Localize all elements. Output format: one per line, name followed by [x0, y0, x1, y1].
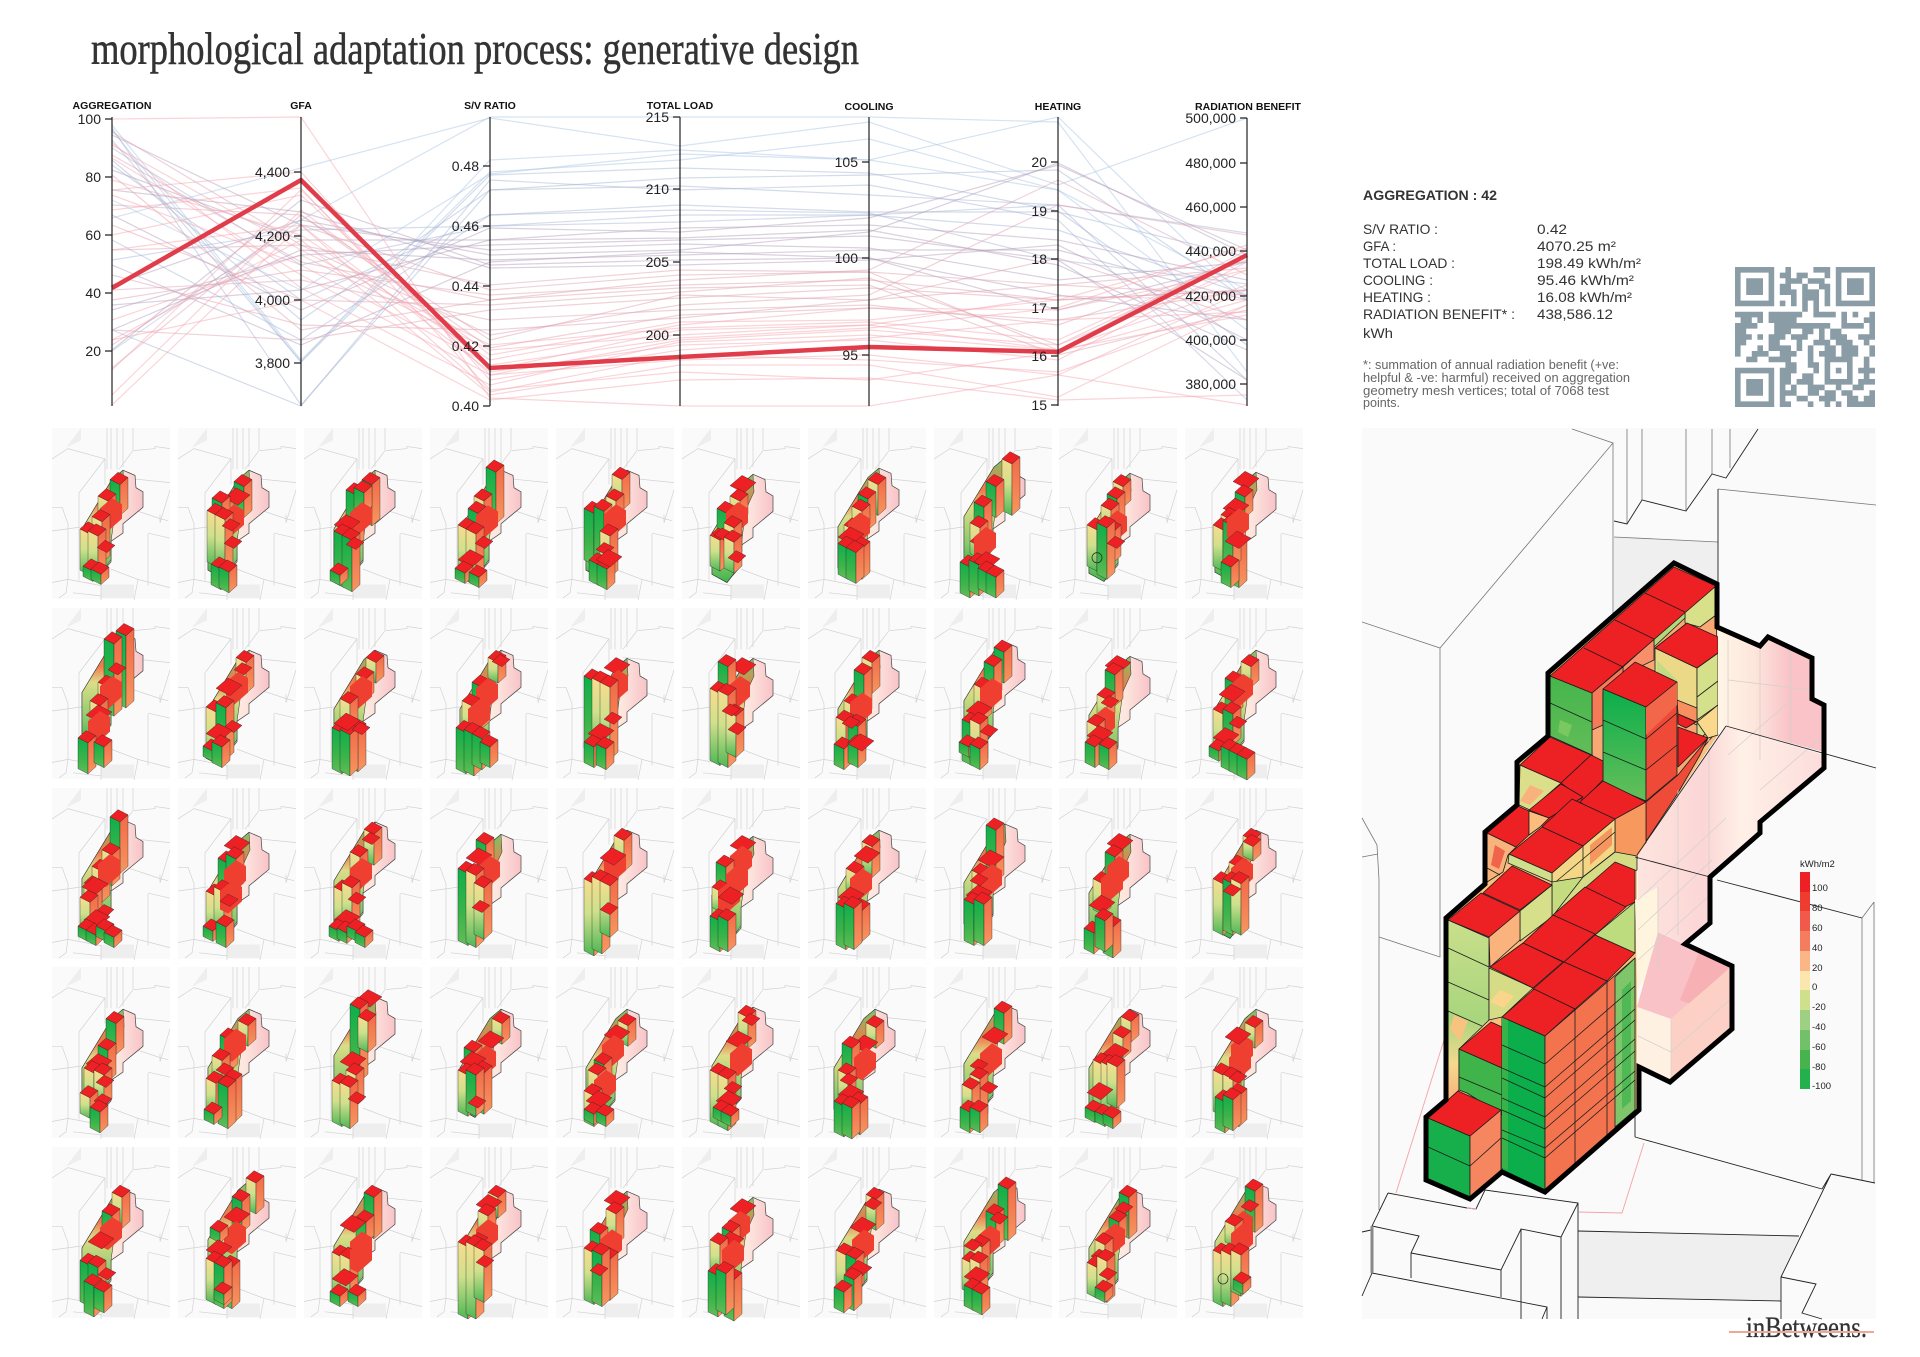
- thumbnail row 3 col 6: [682, 788, 800, 960]
- axis: GFA: GFA: [290, 100, 312, 112]
- axis: S/V ratio: 0.44: [452, 278, 479, 294]
- thumbnail row 3 col 5: [556, 788, 674, 960]
- metric labels: [1363, 221, 1515, 341]
- thumbnail row 5 col 2: [178, 1147, 296, 1319]
- legend: radiation colour scale: 0: [1812, 982, 1817, 993]
- thumbnail row 2 col 8: [934, 608, 1052, 780]
- parallel coordinates chart: [72, 100, 1302, 414]
- thumbnail row 4 col 10: [1185, 967, 1303, 1139]
- thumbnail row 3 col 3: [304, 788, 422, 960]
- back row west face: [1550, 676, 1592, 755]
- thumbnail row 4 col 3: [304, 967, 422, 1139]
- axis: GFA: [255, 100, 312, 406]
- axis: cooling: [835, 101, 894, 406]
- thumbnail row 4 col 6: [682, 967, 800, 1139]
- axis: aggregation: 40: [85, 285, 101, 301]
- axis: radiation benefit: RADIATION BENEFIT: [1195, 101, 1302, 113]
- footnote: helpful & -ve: harmful) received on aggregation: [1363, 371, 1630, 385]
- axis: radiation benefit: [1185, 101, 1302, 406]
- metric values: 95.46 kWh/m²: [1537, 272, 1634, 288]
- black outline of aggregation: [1426, 563, 1824, 1199]
- thumbnail row 3 col 2: [178, 788, 296, 960]
- mid right roof pieces: [1615, 705, 1718, 866]
- axis: S/V ratio: 0.42: [452, 338, 479, 354]
- axis: total load: TOTAL LOAD: [647, 100, 714, 112]
- axis: aggregation: 100: [78, 111, 101, 127]
- middle west face and roofs: [1529, 755, 1646, 846]
- metric labels: RADIATION BENEFIT* :: [1363, 306, 1515, 322]
- thumbnail row 2 col 6: [682, 608, 800, 780]
- thumbnail row 5 col 9: [1059, 1147, 1177, 1319]
- metric values: 16.08 kWh/m²: [1537, 289, 1632, 305]
- axis: S/V ratio: 0.46: [452, 218, 479, 234]
- thumbnail row 5 col 7: [808, 1147, 926, 1319]
- metric labels: S/V RATIO :: [1363, 221, 1438, 237]
- thumbnail row 2 col 5: [556, 608, 674, 780]
- thumbnail row 5 col 5: [556, 1147, 674, 1319]
- panel background: [1362, 428, 1876, 1319]
- metric values: 438,586.12: [1537, 306, 1613, 322]
- axis: aggregation: [72, 100, 152, 406]
- axis: heating: 16: [1031, 348, 1047, 364]
- axis: radiation benefit: 380,000: [1185, 376, 1236, 392]
- axis: S/V ratio: [452, 100, 516, 414]
- thumbnail row 2 col 3: [304, 608, 422, 780]
- legend: radiation colour scale: 60: [1812, 923, 1823, 934]
- axis: aggregation: 20: [85, 343, 101, 359]
- axis: cooling: 100: [835, 250, 858, 266]
- thumbnail row 1 col 5: [556, 428, 674, 600]
- lower roofs: [1489, 862, 1635, 1020]
- axis: total load: 210: [646, 181, 669, 197]
- axis: cooling: COOLING: [844, 101, 894, 113]
- thumbnail row 4 col 9: [1059, 967, 1177, 1139]
- axis: aggregation: 60: [85, 227, 101, 243]
- axis: GFA: 4,000: [255, 292, 290, 308]
- thumbnail row 1 col 3: [304, 428, 422, 600]
- ground lines over envelope: [1635, 726, 1876, 877]
- thumbnail row 4 col 8: [934, 967, 1052, 1139]
- axis: total load: [646, 100, 714, 406]
- selected design data: [1363, 187, 1641, 410]
- footnote: points.: [1363, 396, 1400, 410]
- legend: radiation colour scale: -40: [1812, 1022, 1826, 1033]
- heading: aggregation 42: AGGREGATION : 42: [1363, 187, 1497, 203]
- axis: S/V ratio: 0.48: [452, 158, 479, 174]
- legend: radiation colour scale: [1800, 859, 1835, 1092]
- footnote: *: summation of annual radiation benefit (+ve:: [1363, 358, 1619, 372]
- axis: cooling: 95: [842, 347, 858, 363]
- base fill under massing: [1428, 565, 1718, 1197]
- metric values: 4070.25 m²: [1537, 238, 1616, 254]
- mid green block: [1459, 1022, 1502, 1115]
- thumbnail row 2 col 7: [808, 608, 926, 780]
- middle roofs: [1519, 737, 1646, 827]
- thumbnail row 4 col 7: [808, 967, 926, 1139]
- thumbnail row 5 col 8: [934, 1147, 1052, 1319]
- thumbnail row 5 col 1: [52, 1147, 170, 1319]
- thumbnail row 3 col 4: [430, 788, 548, 960]
- axis: heating: [1031, 101, 1081, 413]
- thumbnail row 1 col 2: [178, 428, 296, 600]
- axis: radiation benefit: 400,000: [1185, 332, 1236, 348]
- legend: radiation colour scale: -20: [1812, 1002, 1826, 1013]
- thumbnail row 3 col 1: [52, 788, 170, 960]
- axis: S/V ratio: 0.40: [452, 398, 479, 414]
- legend: radiation colour scale: 80: [1812, 903, 1823, 914]
- thumbnail row 3 col 10: [1185, 788, 1303, 960]
- thumbnail row 5 col 3: [304, 1147, 422, 1319]
- metric values: 198.49 kWh/m²: [1537, 255, 1641, 271]
- axis: heating: 15: [1031, 397, 1047, 413]
- axis: radiation benefit: 500,000: [1185, 110, 1236, 126]
- front small block: [1428, 1091, 1501, 1197]
- axis: GFA: 4,200: [255, 228, 290, 244]
- hero panel: selected aggregation with radiation map: [1362, 428, 1876, 1319]
- metric labels: COOLING :: [1363, 272, 1433, 288]
- thumbnail row 4 col 1: [52, 967, 170, 1139]
- axis: aggregation: AGGREGATION: [72, 100, 152, 112]
- metric labels: GFA :: [1363, 238, 1396, 254]
- highlighted solution line: aggregation 42: [112, 180, 1247, 368]
- thumbnail row 1 col 6: [682, 428, 800, 600]
- legend: radiation colour scale: -60: [1812, 1042, 1826, 1053]
- metric labels: HEATING :: [1363, 289, 1431, 305]
- axis: cooling: 105: [835, 154, 858, 170]
- axis: heating: 20: [1031, 154, 1047, 170]
- axis: radiation benefit: 440,000: [1185, 243, 1236, 259]
- axis: radiation benefit: 480,000: [1185, 155, 1236, 171]
- legend: radiation colour scale: -80: [1812, 1062, 1826, 1073]
- tall tower: [1603, 662, 1677, 801]
- legend: radiation colour scale: 20: [1812, 963, 1823, 974]
- legend: radiation colour scale: -100: [1812, 1081, 1831, 1092]
- metric labels: kWh: [1363, 325, 1393, 341]
- thumbnail row 5 col 10: [1185, 1147, 1303, 1319]
- thumbnail row 1 col 4: [430, 428, 548, 600]
- axis: GFA: 4,400: [255, 164, 290, 180]
- thumbnail row 1 col 9: [1059, 428, 1177, 600]
- ghost envelope: [1635, 627, 1824, 1082]
- thumbnail row 5 col 6: [682, 1147, 800, 1321]
- thumbnail row 1 col 7: [808, 428, 926, 600]
- axis: total load: 205: [646, 254, 669, 270]
- radiation-mapped building massing: [1428, 565, 1718, 1197]
- axis: heating: HEATING: [1035, 101, 1081, 113]
- small upper box: [1655, 623, 1718, 740]
- legend: radiation colour scale: kWh/m2: [1800, 859, 1835, 870]
- front-left roofs and faces: [1448, 866, 1552, 1100]
- thumbnail row 2 col 4: [430, 608, 548, 780]
- thumbnail row 2 col 1: [52, 608, 170, 780]
- thumbnail row 2 col 10: [1185, 608, 1303, 780]
- footnote: geometry mesh vertices; total of 7068 test: [1363, 384, 1610, 398]
- thumbnail row 1 col 10: [1185, 428, 1303, 600]
- metric labels: TOTAL LOAD :: [1363, 255, 1455, 271]
- thumbnail row 4 col 2: [178, 967, 296, 1139]
- axis: aggregation: 80: [85, 169, 101, 185]
- title: morphological adaptation process: generative design: [91, 23, 859, 74]
- candidate lines: [112, 117, 1247, 406]
- thumbnail row 2 col 2: [178, 608, 296, 780]
- thumbnail row 1 col 8: [934, 428, 1052, 600]
- thumbnail row 1 col 1: [52, 428, 170, 600]
- footnote: [1363, 358, 1630, 410]
- axis: GFA: 3,800: [255, 355, 290, 371]
- box at left: [1487, 806, 1549, 882]
- QR code: [1735, 270, 1875, 404]
- thumbnail row 4 col 5: [556, 967, 674, 1139]
- context buildings: [1362, 429, 1876, 1319]
- thumbnail grid: 50 generated designs: [52, 428, 1303, 1321]
- tall front block: [1502, 958, 1635, 1190]
- legend: radiation colour scale: 100: [1812, 883, 1828, 894]
- thumbnail row 5 col 4: [430, 1147, 548, 1319]
- metric values: 0.42: [1537, 221, 1567, 237]
- axis: radiation benefit: 420,000: [1185, 288, 1236, 304]
- stepped central box: [1508, 799, 1646, 917]
- axis: heating: 18: [1031, 251, 1047, 267]
- legend: radiation colour scale: 40: [1812, 943, 1823, 954]
- thumbnail row 3 col 7: [808, 788, 926, 960]
- axis: heating: 19: [1031, 203, 1047, 219]
- axis: radiation benefit: 460,000: [1185, 199, 1236, 215]
- axis: heating: 17: [1031, 300, 1047, 316]
- axis: total load: 215: [646, 109, 669, 125]
- thumbnail row 4 col 4: [430, 967, 548, 1139]
- back row roofs: [1550, 567, 1716, 693]
- thumbnail row 3 col 9: [1059, 788, 1177, 960]
- back row east faces: [1592, 586, 1718, 802]
- metric values: [1537, 221, 1641, 322]
- axis: total load: 200: [646, 327, 669, 343]
- thumbnail row 2 col 9: [1059, 608, 1177, 780]
- logo: inBetweens: inBetweens.: [1746, 1311, 1867, 1344]
- thumbnail row 3 col 8: [934, 788, 1052, 960]
- axis: S/V ratio: S/V RATIO: [464, 100, 516, 112]
